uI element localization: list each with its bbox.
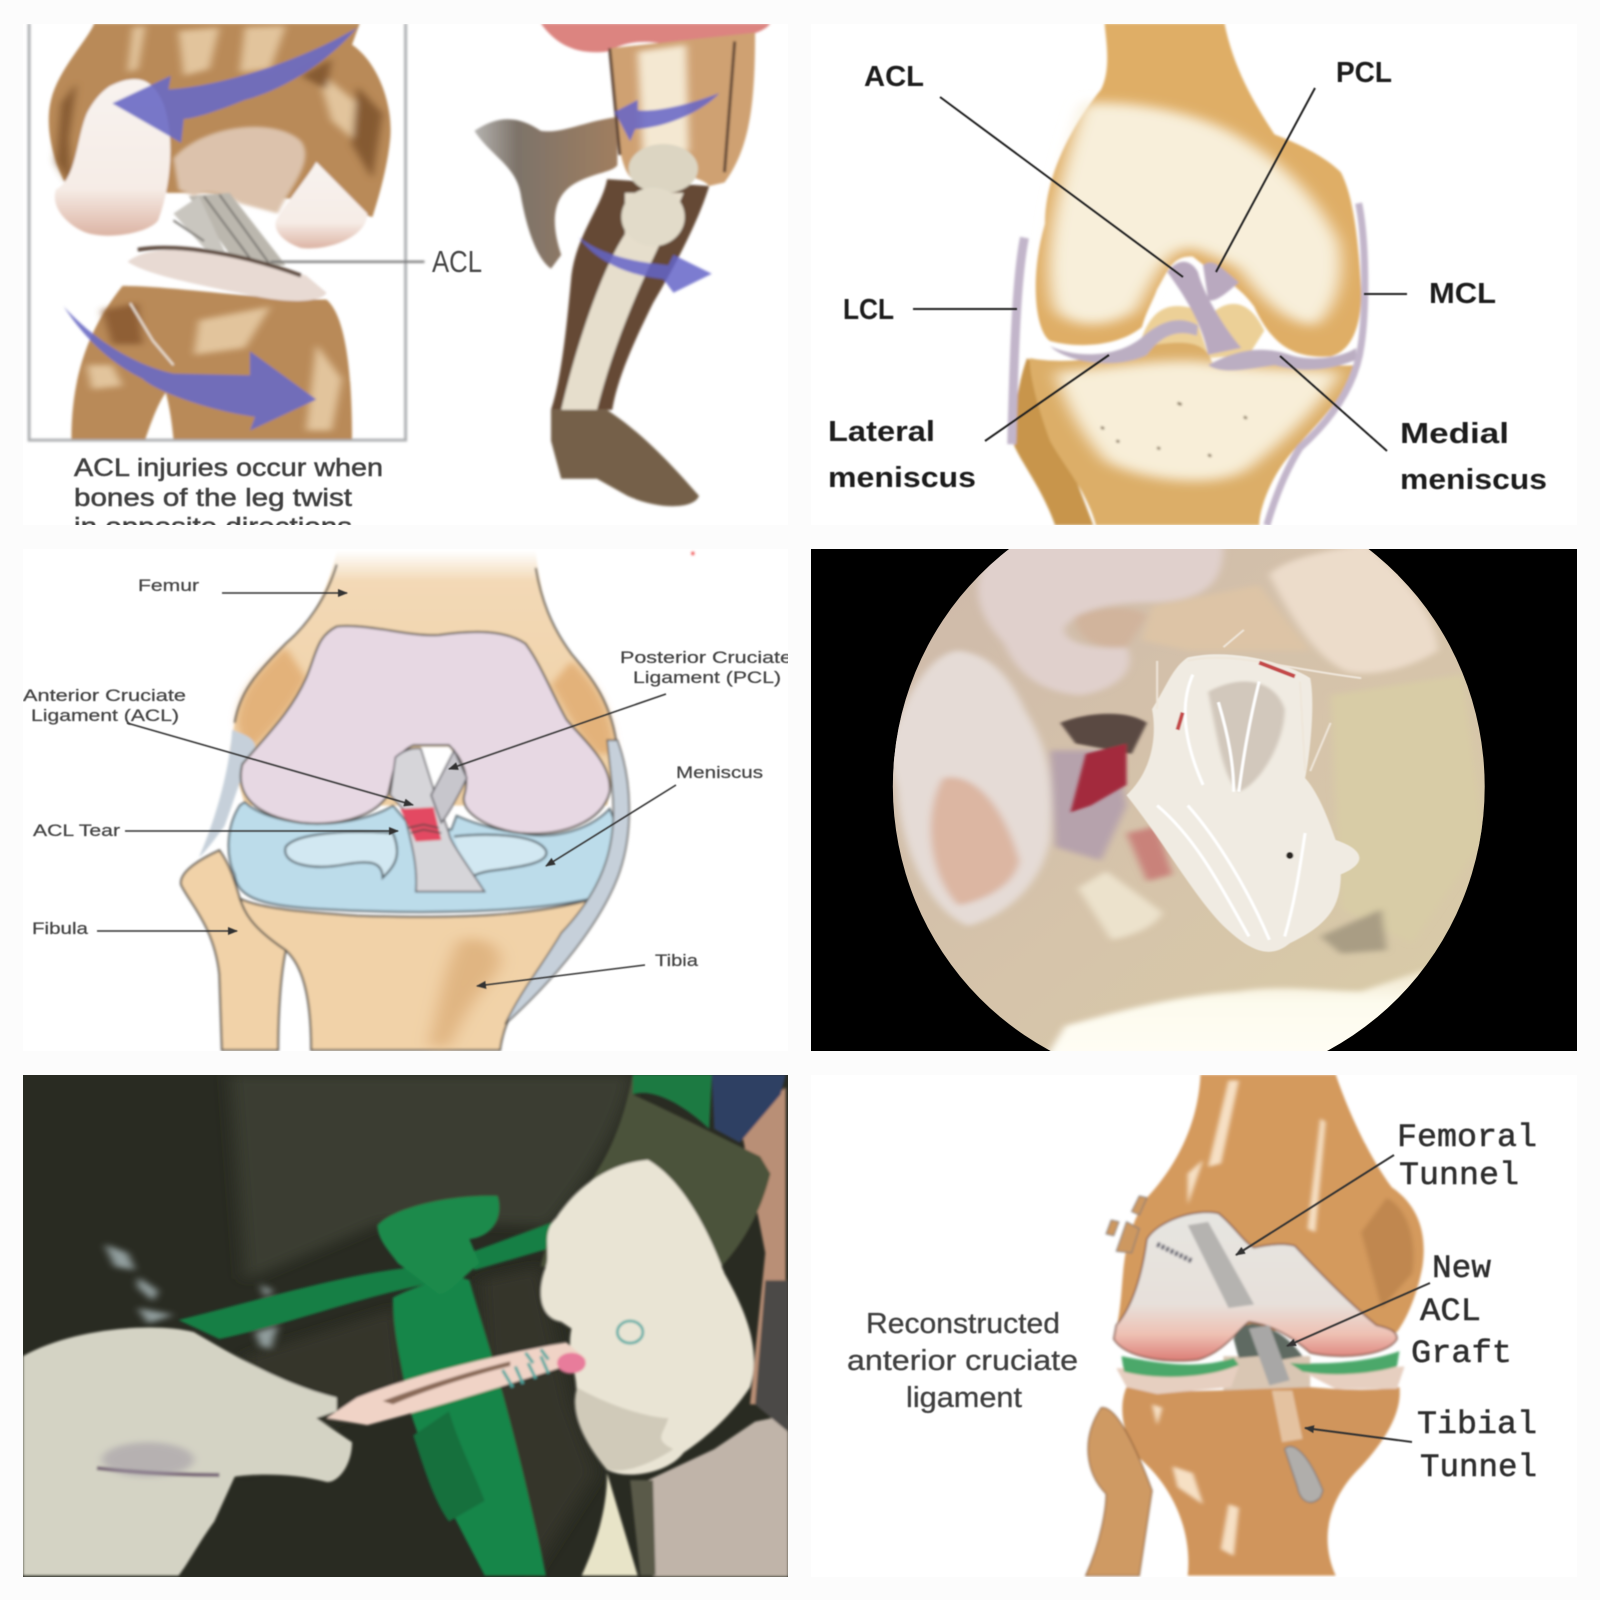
leg: tibia and fibula bones — [561, 193, 684, 410]
gown background — [23, 1075, 788, 1577]
label: medial meniscus: meniscus — [1400, 464, 1547, 496]
ACL leader line — [270, 261, 424, 263]
meniscus left inner — [285, 832, 397, 878]
ACL ligament — [390, 748, 485, 892]
sleeve background skin — [740, 1088, 786, 1404]
panel background — [23, 24, 788, 525]
leader lines — [913, 88, 1407, 451]
dark cavity and blood — [1060, 714, 1147, 812]
right collateral ligament — [505, 740, 629, 1024]
dark cavity — [1060, 714, 1147, 754]
label: Femur: Femur — [138, 576, 199, 595]
tibia — [240, 899, 594, 1050]
label: Anterior Cruciate: Anterior Cruciate — [23, 686, 186, 705]
caption line two: bones of the leg twist — [74, 484, 352, 512]
arrow: thigh twist — [615, 93, 719, 141]
right glove — [541, 1160, 754, 1475]
top right shading — [1142, 585, 1310, 651]
caption line three: in opposite directions — [74, 513, 352, 541]
arrow: shin twist — [579, 238, 712, 293]
green meniscus left — [1121, 1356, 1239, 1377]
panel: ACL tear diagram — [23, 549, 792, 1051]
femur — [230, 551, 617, 806]
lower left fragment — [1078, 871, 1162, 940]
gown stains — [105, 1244, 278, 1349]
femur outline — [235, 564, 617, 750]
small red fragment — [1127, 826, 1172, 881]
label: PCL: PCL — [1336, 57, 1392, 89]
panel background — [23, 549, 788, 1051]
graft sutures — [503, 1349, 548, 1387]
graft tip — [557, 1353, 586, 1373]
graft lower — [1249, 1325, 1290, 1385]
leg: kneecap — [629, 144, 698, 194]
tendon graft — [327, 1342, 587, 1425]
label: New: New — [1432, 1250, 1491, 1287]
tibia — [1116, 1387, 1400, 1576]
green tie: lower fold — [413, 1411, 485, 1521]
left glove shadow — [102, 1442, 194, 1477]
panel: ACL injury mechanism — [23, 23, 788, 541]
label: anterior cruciate: anterior cruciate — [847, 1345, 1078, 1377]
fibula — [1086, 1408, 1152, 1576]
black surround — [811, 549, 1577, 1051]
caption: ACL injuries: ACL injuries occur when — [74, 454, 383, 482]
gown sleeve — [541, 1074, 770, 1274]
photo contents — [23, 1074, 788, 1577]
green meniscus right — [1290, 1351, 1399, 1374]
graft tube end — [1285, 1446, 1323, 1502]
tibia shading — [429, 939, 500, 1047]
femur — [49, 23, 391, 248]
bottom right grey tissue — [1320, 909, 1387, 954]
notch opening — [421, 747, 454, 802]
left glove — [23, 1328, 352, 1576]
panel background — [811, 1075, 1577, 1577]
femur — [1116, 1074, 1424, 1332]
femoral condyles — [241, 626, 610, 834]
upper folds — [978, 544, 1223, 695]
central joint filler — [1223, 1356, 1310, 1391]
label: Graft: Graft — [1411, 1335, 1512, 1372]
illustration: torn ACL — [181, 551, 694, 1050]
right glove shadows — [575, 1387, 673, 1471]
label: lateral meniscus: meniscus — [828, 462, 976, 494]
label: Ligament PCL: Ligament (PCL) — [633, 668, 781, 687]
left meniscal tissue — [887, 651, 1051, 926]
femur — [1036, 23, 1361, 357]
pale tibial plateau — [1116, 1367, 1405, 1394]
label: Tunnel femoral: Tunnel — [1399, 1157, 1519, 1194]
tibia — [71, 248, 352, 439]
leg: shoe — [551, 410, 699, 506]
arrow: upper twist — [112, 28, 357, 143]
leader arrows — [1236, 1155, 1430, 1442]
tibial spines — [1142, 304, 1264, 358]
MCL — [1267, 203, 1365, 525]
arthroscopy image — [851, 530, 1524, 1067]
label: Ligament ACL: Ligament (ACL) — [31, 706, 179, 725]
label: Femoral: Femoral — [1397, 1119, 1537, 1156]
arrow: lower twist — [64, 307, 316, 431]
blood red — [1070, 744, 1127, 812]
fixation hardware — [1106, 1196, 1147, 1253]
upper right condyle — [1269, 544, 1438, 673]
meniscus right inner — [454, 835, 546, 888]
green tie: right band — [469, 1222, 554, 1270]
tibia — [1030, 343, 1356, 525]
cartilage — [1114, 1212, 1397, 1361]
illustration: ACL graft knee — [1086, 1074, 1424, 1576]
meniscus — [229, 802, 620, 912]
leg: tibial head — [621, 188, 685, 246]
panel background — [811, 24, 1577, 525]
leg: shin — [551, 179, 709, 410]
illustration: twisting knee and leg — [29, 23, 770, 506]
leader arrows — [97, 593, 676, 986]
label: ACL: ACL — [864, 61, 924, 93]
ACL tear — [401, 807, 441, 842]
fibula — [181, 850, 286, 1050]
text: panel 6 labels — [847, 1119, 1537, 1486]
screw — [1157, 1244, 1193, 1261]
left tissue inner — [931, 777, 1019, 905]
panel: graft photo — [23, 1074, 788, 1577]
bottom light glare — [1040, 967, 1433, 1067]
label: LCL: LCL — [843, 294, 894, 326]
tissue layer — [887, 544, 1484, 1067]
blue shirt — [712, 1074, 786, 1143]
threads bundle — [582, 1473, 638, 1576]
green tie: tail — [393, 1278, 546, 1576]
figure frame — [29, 23, 406, 440]
ACL and PCL — [1167, 262, 1241, 355]
gown central fold — [245, 1267, 597, 1576]
medial meniscus — [1208, 348, 1356, 371]
torn ACL mass — [1127, 630, 1361, 952]
text: panel 2 labels — [828, 57, 1547, 496]
leg: bent back leg and shoe — [474, 117, 617, 269]
text: panel 1 labels — [74, 244, 482, 541]
strap — [630, 1480, 656, 1576]
label: ACL Tear: ACL Tear — [33, 821, 120, 840]
graft upper — [1188, 1222, 1254, 1308]
intercondylar dark — [1234, 1323, 1303, 1360]
ACL ligament — [173, 193, 286, 269]
leg: thigh with femur — [610, 33, 755, 186]
green tie: left band — [179, 1267, 429, 1339]
label: Lateral: Lateral — [828, 416, 935, 448]
femur edge shading — [237, 647, 615, 754]
label: Meniscus: Meniscus — [676, 763, 763, 782]
label: MCL: MCL — [1429, 278, 1496, 310]
suture loop — [617, 1321, 643, 1343]
left collateral ligament — [199, 730, 255, 857]
panel: reconstructed ACL — [811, 1074, 1577, 1577]
text: panel 3 labels — [23, 576, 792, 970]
tibial tunnel — [1272, 1391, 1303, 1442]
label: Medial: Medial — [1400, 418, 1509, 450]
left glove crease — [97, 1468, 219, 1475]
recess under fold — [1076, 608, 1147, 648]
pale centre right recess — [1331, 675, 1484, 943]
label: ligament: ligament — [906, 1382, 1022, 1414]
room background right — [648, 1415, 788, 1577]
label: ACL: ACL — [432, 244, 482, 279]
graft gap — [383, 1361, 510, 1404]
label: Fibula: Fibula — [32, 919, 89, 938]
fibula — [1012, 358, 1093, 525]
label: Reconstructed: Reconstructed — [866, 1308, 1060, 1340]
tear zigzag — [408, 824, 441, 833]
label: Tunnel tibial: Tunnel — [1420, 1449, 1537, 1486]
label: Tibial: Tibial — [1417, 1406, 1537, 1443]
small red mark — [691, 552, 694, 555]
leg: skirt — [541, 23, 770, 52]
dark right edge object — [755, 1280, 788, 1432]
panel: knee anatomy — [811, 23, 1577, 525]
label: ACL: ACL — [1420, 1293, 1481, 1330]
label: Posterior Cruciate: Posterior Cruciate — [620, 648, 792, 667]
green collar — [633, 1074, 712, 1129]
green tie: knot — [378, 1196, 499, 1294]
scope field — [851, 530, 1524, 1067]
LCL — [1012, 238, 1024, 444]
panel: arthroscopic view — [811, 530, 1577, 1067]
PCL ligament — [431, 750, 467, 823]
gown lighter folds — [230, 1074, 633, 1280]
purple haze middle — [1050, 750, 1127, 861]
lateral meniscus — [1050, 320, 1198, 363]
label: Tibia: Tibia — [655, 951, 699, 970]
illustration: knee bones and ligaments — [1012, 23, 1365, 525]
